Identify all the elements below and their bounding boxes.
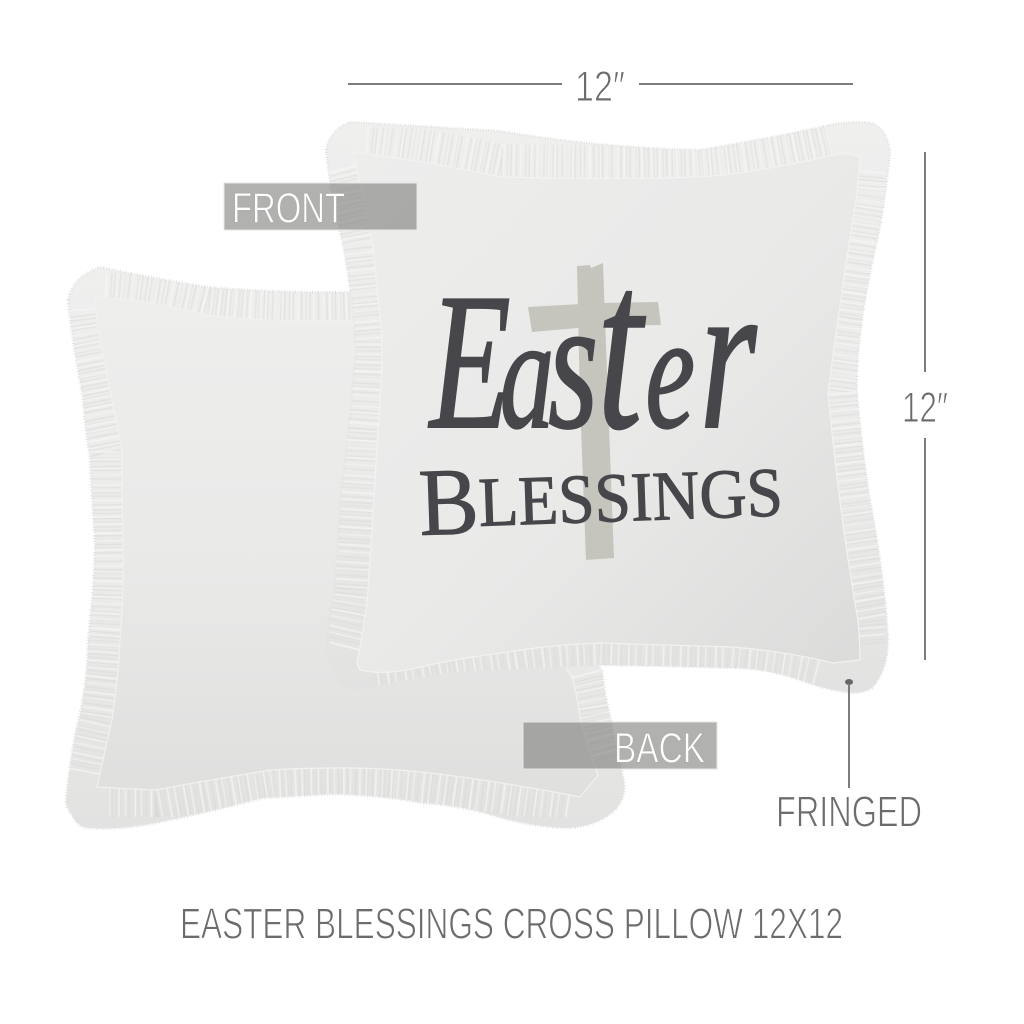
pillow text: Easter: r — [700, 235, 758, 474]
pillow text: Easter: s — [548, 259, 598, 469]
height dimension: 12 inches: 12″ — [902, 384, 948, 432]
back pillow panel — [95, 297, 598, 797]
pillow text: Easter: a — [500, 284, 554, 462]
width dimension: 12 inches: 12″ — [575, 63, 625, 111]
front pillow panel — [353, 152, 860, 672]
callout: fringed: FRINGED — [776, 788, 922, 836]
pillow text: Blessings: LESSINGS — [477, 454, 784, 542]
pillow text: Easter: t — [597, 214, 646, 480]
callout: fringed — [776, 679, 922, 836]
back pillow — [66, 267, 624, 828]
cross graphic — [528, 263, 661, 560]
label: back: BACK — [614, 724, 705, 772]
pillow text: Easter: E — [428, 254, 511, 470]
pillow text: Blessings: B — [417, 447, 480, 556]
front pillow — [326, 122, 890, 693]
label: back — [523, 722, 717, 772]
pillow text: Easter: e — [645, 280, 695, 463]
label: front: FRONT — [232, 184, 345, 232]
